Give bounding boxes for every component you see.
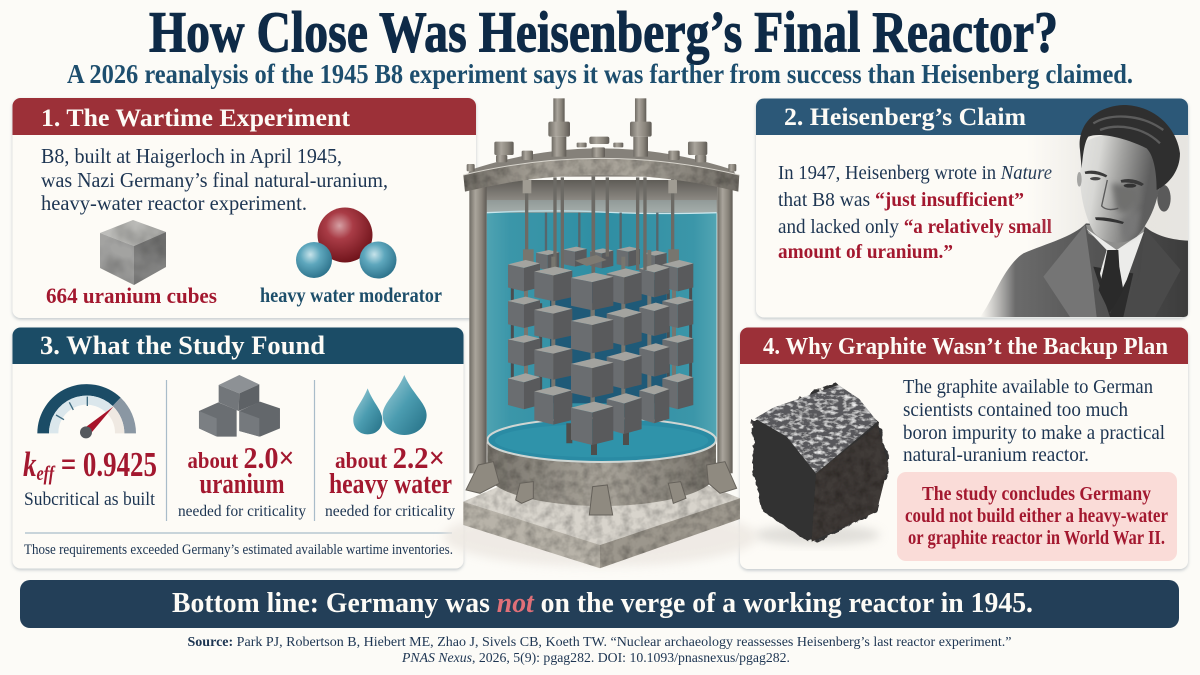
subcritical caption: Subcritical as built xyxy=(24,490,156,510)
panel 1 body text: heavy-water reactor experiment. xyxy=(41,191,307,215)
label: uranium cubes: 664 uranium cubes xyxy=(46,283,217,308)
heavy water requirement: about 2.2× xyxy=(335,440,445,475)
callout: conclusion xyxy=(897,472,1177,561)
reactor illustration xyxy=(443,98,757,568)
panel 4 body text: scientists contained too much xyxy=(903,399,1128,421)
callout: conclusion: The study concludes Germany xyxy=(922,483,1151,505)
panel 3 header: 3. What the Study Found xyxy=(40,331,326,360)
panel 1 body text: was Nazi Germany’s final natural-uranium, xyxy=(41,168,388,192)
label: heavy water moderator: heavy water moderator xyxy=(260,283,442,307)
panel: what the study found xyxy=(12,328,464,568)
bottom line banner xyxy=(20,580,1179,628)
panel 2 body text: In 1947, Heisenberg wrote in Nature xyxy=(778,162,1052,184)
base drum xyxy=(487,443,716,506)
source citation xyxy=(188,634,1012,665)
concrete plinth xyxy=(463,443,740,568)
control posts and bolts xyxy=(467,98,736,171)
icon: heavy water molecule xyxy=(296,208,396,278)
panel 2 header xyxy=(756,98,1188,135)
heavy water caption: needed for criticality xyxy=(325,503,455,520)
panel 4 body text: natural-uranium reactor. xyxy=(903,444,1089,466)
back rods and cubes xyxy=(536,213,667,403)
footnote: Those requirements exceeded Germany’s estimated available wartime inventories. xyxy=(24,542,453,558)
panel 1 header: 1. The Wartime Experiment xyxy=(41,105,351,132)
back wall xyxy=(486,180,717,213)
bottom line banner: Bottom line: Germany was not on the verge of a working reactor in 1945. xyxy=(172,587,1033,619)
uranium requirement xyxy=(188,440,294,500)
panel 2 body text xyxy=(778,162,1052,263)
panel 2 body text: and lacked only “a relatively small xyxy=(778,216,1052,238)
panel 3 header xyxy=(12,328,464,364)
panel: why graphite wasn't the backup plan xyxy=(740,328,1188,569)
icon: uranium cube xyxy=(100,220,166,285)
panel 2 body text: amount of uranium.” xyxy=(778,241,953,263)
uranium caption: needed for criticality xyxy=(178,503,306,520)
panel 1 body text xyxy=(41,144,388,215)
water tank xyxy=(487,200,717,462)
source citation: Source: Park PJ, Robertson B, Hiebert ME, Zhao J, Sivels CB, Koeth TW. “Nuclear archaeology reassesses Heisenberg’s last reactor experiment.” xyxy=(188,634,1012,649)
panel 2 header: 2. Heisenberg’s Claim xyxy=(784,104,1026,131)
panel 2 body text: that B8 was “just insufficient” xyxy=(778,189,1024,211)
panel 1 header xyxy=(12,98,476,135)
panel 4 header: 4. Why Graphite Wasn’t the Backup Plan xyxy=(763,333,1168,360)
k-eff value: k xyxy=(23,445,37,484)
uranium requirement: about 2.0× xyxy=(188,440,294,475)
icon: water drops xyxy=(353,375,427,435)
icon: gauge xyxy=(37,384,136,438)
source citation: PNAS Nexus, 2026, 5(9): pgag282. DOI: 10.1093/pnasnexus/pgag282. xyxy=(401,650,790,665)
panel 4 body text xyxy=(903,376,1165,466)
heavy water requirement: heavy water xyxy=(329,469,452,500)
portrait of Heisenberg xyxy=(980,105,1188,317)
uranium requirement: uranium xyxy=(200,469,284,500)
base brackets xyxy=(466,462,737,515)
uranium cube columns xyxy=(508,176,693,455)
panel 4 body text: boron impurity to make a practical xyxy=(903,422,1165,444)
panel: Heisenberg's claim xyxy=(756,98,1188,318)
top plate and flange xyxy=(463,148,739,192)
heavy water requirement xyxy=(329,440,452,500)
tank pillars xyxy=(469,185,733,473)
panel 4 body text: The graphite available to German xyxy=(903,376,1153,398)
icon: graphite lump xyxy=(752,383,889,545)
icon: three cubes xyxy=(199,375,280,437)
panel 1 body text: B8, built at Haigerloch in April 1945, xyxy=(41,144,342,168)
k-eff value: eff xyxy=(36,461,56,485)
panel: the wartime experiment xyxy=(12,98,476,318)
k-eff value: = 0.9425 xyxy=(54,445,157,484)
panel 4 header xyxy=(740,328,1188,364)
